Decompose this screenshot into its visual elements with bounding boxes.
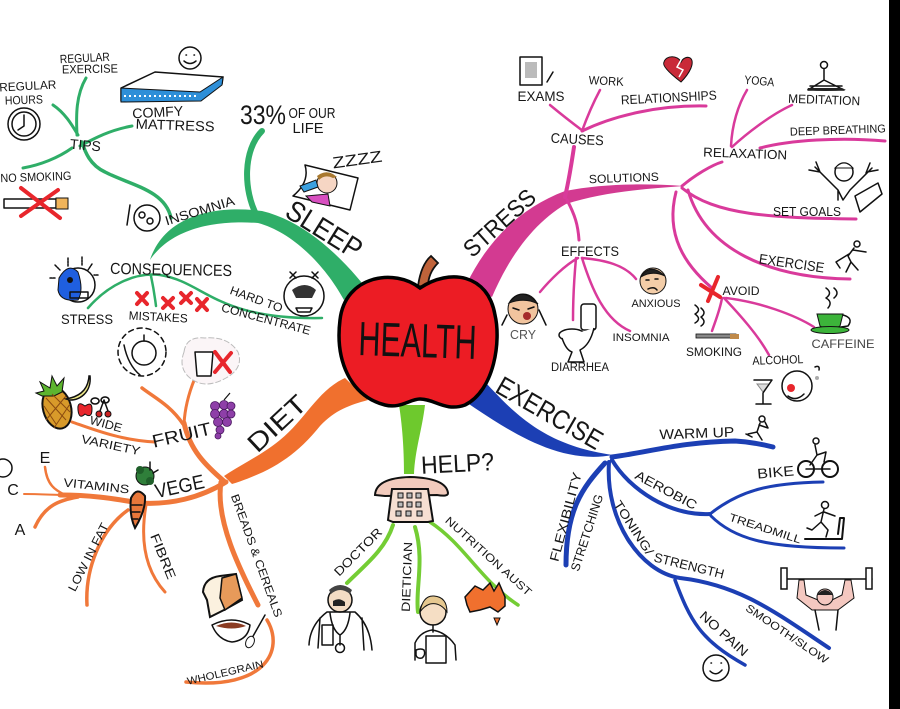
- icon: runner warming up: [746, 416, 768, 440]
- exercise labels: BIKE: [756, 462, 795, 482]
- stress labels: INSOMNIA: [613, 332, 670, 344]
- sleep labels: LIFE: [292, 120, 324, 137]
- branch: sleep: [0, 47, 384, 338]
- icon: smiling face on mattress: [179, 47, 201, 69]
- icon: treadmill runner: [805, 502, 844, 539]
- icon: smiley: [703, 655, 729, 681]
- stress labels: EFFECTS: [561, 243, 619, 259]
- diet labels: VITAMINS: [63, 476, 130, 496]
- diet labels: E: [40, 450, 50, 467]
- exercise labels: FLEXIBILITY: [547, 470, 585, 563]
- sleep labels: STRESS: [61, 311, 113, 327]
- sleep labels: HARD TO: [228, 283, 285, 315]
- sleep labels: MISTAKES: [128, 308, 188, 326]
- icon: banana: [66, 376, 90, 400]
- exercise labels: EXERCISE: [491, 371, 608, 456]
- sleep labels: OF OUR: [288, 105, 336, 122]
- icon: vitamin D circle: [0, 459, 12, 477]
- diet labels: VARIETY: [80, 432, 142, 458]
- sleep labels: HOURS: [5, 92, 43, 108]
- diet main limb: [224, 378, 368, 484]
- diet labels: C: [7, 482, 19, 499]
- icon: stressed blue face: [50, 257, 98, 302]
- branch: help: [309, 405, 534, 663]
- icon: sleeping person in bed: [293, 165, 358, 210]
- diet labels: [7, 388, 313, 688]
- icon: clock: [8, 108, 40, 140]
- sleep twigs: [23, 78, 322, 318]
- stress labels: CRY: [510, 327, 536, 342]
- stress labels: CAUSES: [550, 130, 604, 148]
- stress labels: ALCOHOL: [752, 352, 804, 368]
- icon: meditating person: [807, 62, 846, 91]
- icon: running figure: [836, 241, 866, 272]
- icon: cereal bowl and spoon: [212, 615, 265, 649]
- exercise labels: [491, 371, 831, 667]
- icon: coffee cup: [811, 288, 850, 334]
- sleep labels: SLEEP: [280, 195, 368, 266]
- help twigs: [347, 522, 518, 612]
- stress labels: STRESS: [458, 184, 542, 263]
- black edge strip: [889, 0, 900, 709]
- icon: dietician: [415, 596, 456, 663]
- icon: dizzy face: [284, 272, 324, 316]
- icon: grapes: [210, 393, 235, 439]
- diet labels: WHOLEGRAIN: [186, 658, 265, 688]
- icon: broken heart: [664, 57, 692, 82]
- help labels: NUTRITION AUST: [442, 515, 534, 599]
- icon: mattress: [121, 72, 223, 102]
- icon: toilet: [559, 304, 596, 362]
- stress labels: CAFFEINE: [811, 337, 875, 351]
- apple stem: [418, 256, 438, 287]
- help labels: DIETICIAN: [399, 542, 415, 612]
- icon: pineapple: [36, 376, 76, 432]
- icon: apple in sun: [118, 328, 166, 376]
- sleep labels: ZZZZ: [331, 149, 384, 172]
- stress labels: RELAXATION: [703, 145, 787, 162]
- icon: bread: [203, 574, 242, 617]
- icon: crying face: [502, 294, 546, 325]
- sleep labels: INSOMNIA: [163, 193, 237, 228]
- stress labels: RELATIONSHIPS: [620, 87, 717, 108]
- exercise labels: TONING/: [611, 498, 656, 558]
- icon: broccoli: [136, 462, 158, 485]
- exercise labels: WARM UP: [659, 424, 735, 442]
- icon: Australia map: [465, 583, 505, 625]
- diet twigs: [24, 378, 273, 683]
- exercise labels: STRETCHING: [568, 493, 606, 573]
- icon: crossed-out cigarette: [4, 188, 68, 218]
- help labels: DOCTOR: [331, 525, 385, 579]
- sleep labels: CONCENTRATE: [220, 300, 312, 338]
- icon: red cross avoid: [701, 277, 720, 301]
- stress labels: ANXIOUS: [632, 298, 680, 310]
- icon: drunk face with martini: [754, 366, 819, 404]
- help main limb: [399, 405, 425, 474]
- sleep labels: REGULAR: [0, 78, 57, 94]
- icon: weightlifter: [781, 568, 872, 630]
- stress labels: EXAMS: [518, 88, 564, 104]
- icon: insomnia face: [127, 205, 160, 231]
- sleep labels: REGULAR: [59, 50, 110, 66]
- icon: telephone: [375, 477, 448, 522]
- exercise labels: STRENGTH: [652, 550, 726, 582]
- stress labels: DIARRHEA: [551, 362, 609, 374]
- sleep labels: 33%: [240, 100, 286, 130]
- help labels: HELP?: [420, 448, 495, 480]
- stress labels: SET GOALS: [773, 204, 841, 219]
- icon: doctor: [309, 585, 372, 652]
- stress labels: AVOID: [722, 284, 760, 298]
- diet labels: VEGE: [153, 471, 206, 503]
- exercise labels: SMOOTH/SLOW: [743, 602, 831, 667]
- stress labels: [458, 73, 886, 374]
- sleep main limb: [150, 209, 362, 300]
- branch: diet: [0, 328, 368, 688]
- icon: apple and cherries: [78, 397, 111, 417]
- icon: cigarette: [695, 305, 739, 339]
- icon: cyclist: [798, 438, 838, 477]
- exercise labels: AEROBIC: [633, 467, 700, 513]
- sleep labels: CONSEQUENCES: [110, 261, 232, 280]
- sleep labels: TIPS: [69, 136, 102, 154]
- stress labels: MEDITATION: [788, 92, 860, 108]
- exercise twigs: [566, 441, 844, 665]
- branch: stress: [458, 57, 886, 404]
- diet labels: FRUIT: [150, 419, 213, 452]
- exercise main limb: [466, 384, 613, 457]
- sleep labels: MATTRESS: [135, 116, 215, 134]
- diet labels: A: [15, 522, 26, 539]
- apple: [339, 277, 497, 407]
- stress labels: SOLUTIONS: [589, 170, 659, 186]
- help labels: [331, 448, 534, 612]
- diet labels: BREADS & CEREALS: [228, 493, 284, 619]
- stress labels: DEEP BREATHING: [790, 123, 886, 139]
- branch: exercise: [466, 371, 872, 681]
- sleep labels: NO SMOKING: [0, 169, 72, 185]
- stress labels: SMOKING: [686, 345, 742, 359]
- central title: HEALTH: [358, 313, 477, 370]
- icon: frantic nurse: [809, 162, 882, 212]
- diet labels: DIET: [241, 388, 313, 458]
- icon: carrot: [130, 491, 145, 528]
- icon: anxious face: [640, 268, 666, 294]
- sleep labels: [0, 50, 384, 338]
- sleep labels: EXERCISE: [62, 62, 118, 76]
- sleep labels: COMFY: [132, 103, 184, 121]
- stress main limb: [466, 184, 684, 297]
- icon: exam paper: [520, 57, 553, 85]
- stress labels: YOGA: [744, 73, 775, 89]
- stress labels: EXERCISE: [758, 251, 825, 276]
- exercise labels: TREADMILL: [727, 512, 802, 546]
- stress twigs: [540, 90, 885, 355]
- icon: red crosses: [137, 293, 207, 310]
- diet labels: WIDE: [88, 413, 124, 435]
- diet labels: LOW IN FAT: [65, 520, 112, 594]
- icon: glass in cloud with cross: [182, 338, 240, 384]
- exercise labels: NO PAIN: [697, 608, 751, 659]
- diet labels: FIBRE: [147, 531, 179, 582]
- stress labels: WORK: [588, 73, 624, 89]
